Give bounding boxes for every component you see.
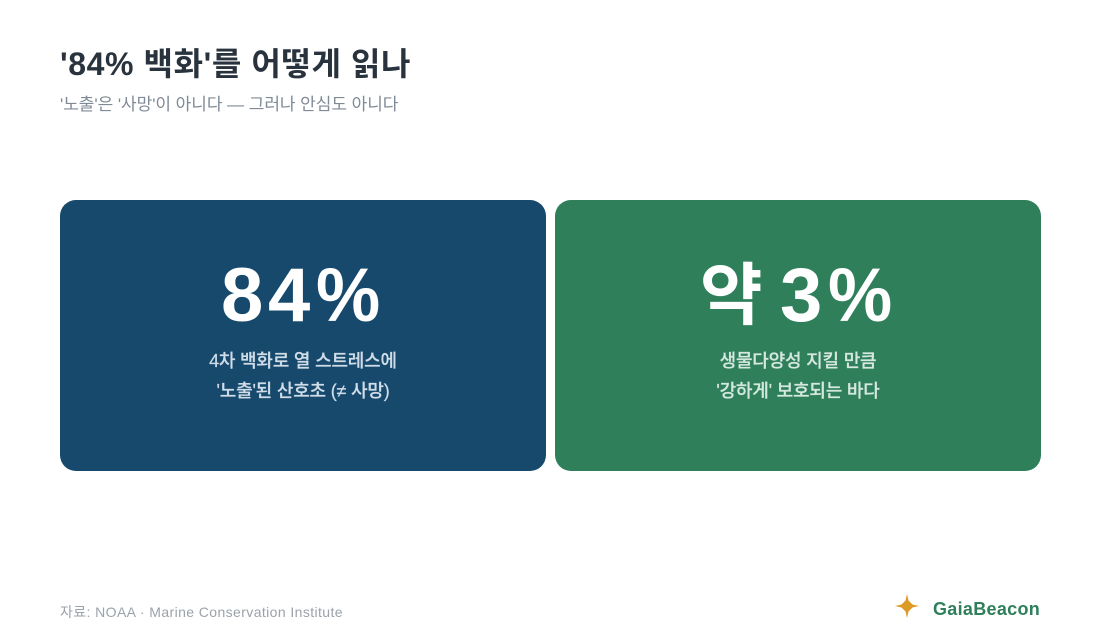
icon: gold star xyxy=(895,594,919,618)
brand name: GaiaBeacon xyxy=(933,599,1040,619)
stat: about 3%: 약 xyxy=(700,258,763,334)
stat: about 3%: % xyxy=(828,253,892,338)
description: exposed corals: 4차 백화로 열 스트레스에 xyxy=(209,351,397,371)
description: protected ocean: '강하게' 보호되는 바다 xyxy=(716,381,880,401)
source note: 자료: NOAA · Marine Conservation Institute xyxy=(60,604,343,620)
description: protected ocean: 생물다양성 지킬 만큼 xyxy=(720,351,876,371)
stat: 84%: 4 xyxy=(268,253,310,338)
panel: 84% exposed corals xyxy=(60,200,546,471)
stat: about 3% xyxy=(700,253,892,338)
description: exposed corals: '노출'된 산호초 (≠ 사망) xyxy=(216,381,390,401)
panel: about 3% protected ocean xyxy=(555,200,1041,471)
stat: about 3%: 3 xyxy=(780,253,822,338)
stat: 84%: 8 xyxy=(221,253,263,338)
title: '84% 백화'를 어떻게 읽나 xyxy=(60,46,411,82)
stat: 84% xyxy=(221,253,380,338)
subtitle: '노출'은 '사망'이 아니다 — 그러나 안심도 아니다 xyxy=(60,95,398,114)
stat: 84%: % xyxy=(316,253,380,338)
description: exposed corals xyxy=(209,351,397,402)
description: protected ocean xyxy=(716,351,880,401)
